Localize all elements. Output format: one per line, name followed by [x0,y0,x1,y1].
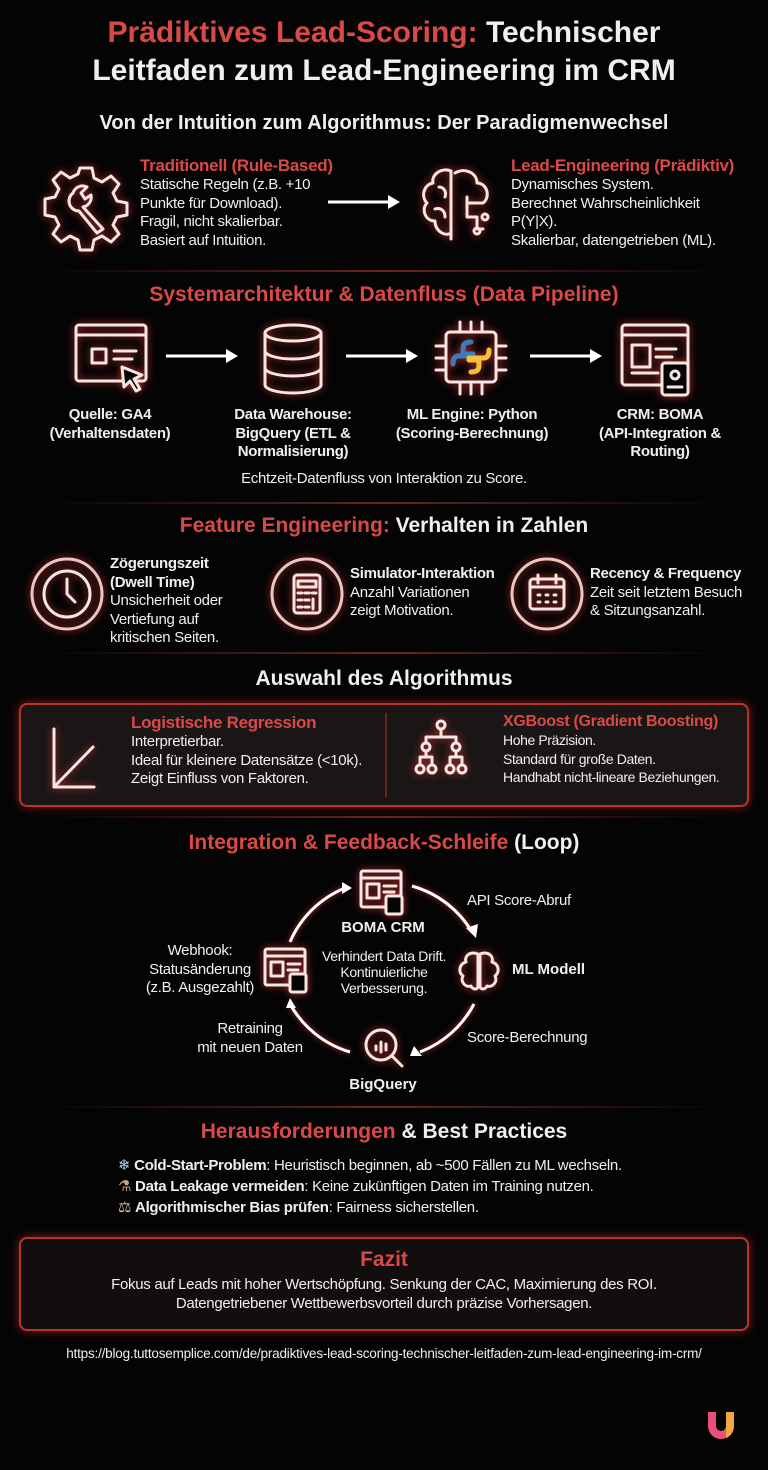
text: lead engineering: Lead-Engineering (Prädiktiv) [511,156,734,175]
arrows [286,881,478,1057]
loop diagram: Webhook: [168,942,232,959]
heading: integration loop: Integration & Feedback-Schleife (Loop) [189,831,579,854]
loop diagram: Score-Berechnung [467,1029,587,1046]
subtitle: paradigm shift: Von der Intuition zum Algorithmus: Der Paradigmenwechsel [100,112,668,134]
labels: Quelle: GA4 [69,406,151,423]
panel: algorithms: Handhabt nicht-lineare Beziehungen. [503,769,719,785]
panel: conclusion: Datengetriebener Wettbewerbsvorteil durch präzise Vorhersagen. [176,1294,592,1312]
arrow [346,349,418,363]
icon: webhook [258,941,314,1000]
icon: python chip [431,317,511,399]
icon: brain [416,162,494,244]
text: lead engineering: Berechnet Wahrscheinlichkeit [511,194,700,212]
text: traditionell: Fragil, nicht skalierbar. [140,213,283,230]
pipeline: (Scoring-Berechnung) [396,424,548,442]
pipeline: Echtzeit-Datenfluss von Interaktion zu Score. [241,470,527,487]
text: traditionell: Statische Regeln (z.B. +10 [140,176,310,193]
pipeline: Normalisierung) [238,443,348,460]
panel: algorithms [19,703,749,807]
text: traditionell: Punkte für Download). [140,194,282,212]
features [24,552,742,646]
panel: conclusion [19,1237,749,1331]
text: lead engineering: Dynamisches System. [511,176,654,193]
icon: CRM [614,318,696,402]
panel: conclusion: Fokus auf Leads mit hoher Wertschöpfung. Senkung der CAC, Maximierung des ROI. [111,1276,657,1293]
loop diagram: BOMA CRM [341,919,425,936]
pipeline: Routing) [630,443,690,460]
panel: algorithms: Interpretierbar. [131,733,224,750]
bullet list: ⚗ Data Leakage vermeiden: Keine zukünftigen Daten im Training nutzen. [118,1178,594,1195]
pipeline: CRM: BOMA [617,406,703,423]
arrow [166,349,238,363]
text: traditionell: Traditionell (Rule-Based) [140,156,333,175]
pipeline: BigQuery (ETL & [235,424,351,442]
heading: system architecture: Systemarchitektur & Datenfluss (Data Pipeline) [149,283,619,306]
panel: algorithms: Logistische Regression [131,713,316,732]
text: lead engineering: P(Y|X). [511,213,557,230]
features: (Dwell Time) [110,574,194,590]
pipeline: Data Warehouse: [234,406,352,423]
pipeline: ML Engine: Python [407,406,537,423]
features: Zeit seit letztem Besuch [590,584,742,600]
loop diagram: ML Modell [512,961,585,978]
heading: algorithm selection: Auswahl des Algorithmus [255,667,513,690]
icon: clock [24,552,110,636]
features: Unsicherheit oder [110,592,222,609]
icon: gear wrench [38,160,134,258]
loop diagram: Kontinuierliche [340,964,428,980]
loop diagram: Statusänderung [149,960,251,978]
loop diagram: mit neuen Daten [197,1038,303,1056]
icon: tree [410,714,472,780]
pipeline [50,317,721,487]
icon: bigquery [359,1023,408,1072]
title [92,16,676,87]
text: lead engineering [511,156,734,248]
icon: calculator [264,552,350,636]
features: zeigt Motivation. [350,602,453,619]
icon: BOMA CRM [354,864,410,922]
arrow [328,195,400,209]
loop diagram: (z.B. Ausgezahlt) [146,979,254,996]
labels: (Verhaltensdaten) [50,424,170,442]
text: lead engineering: Skalierbar, datengetrieben (ML). [511,232,716,248]
bullet list [118,1157,622,1216]
icon: chart [46,724,99,794]
icon: calendar [504,552,590,636]
loop diagram [146,864,587,1093]
panel: algorithms: Hohe Präzision. [503,732,596,748]
title: Prädiktives Lead-Scoring: Technischer [108,16,660,49]
features: & Sitzungsanzahl. [590,602,705,619]
features: Zögerungszeit [110,555,209,572]
features: Anzahl Variationen [350,584,469,600]
panel: conclusion: Fazit [360,1248,408,1271]
features: Recency & Frequency [590,565,741,582]
features: kritischen Seiten. [110,629,219,646]
text: traditionell: Basiert auf Intuition. [140,232,266,248]
panel: algorithms: Standard für große Daten. [503,750,656,766]
title: Leitfaden zum Lead-Engineering im CRM [92,54,676,87]
url: https://blog.tuttosemplice.com/de/pradiktives-lead-scoring-technischer-leitfaden-zum-lead-engineering-im-crm/ [66,1346,702,1361]
panel: algorithms: Ideal für kleinere Datensätze (<10k). [131,752,362,768]
panel: algorithms: XGBoost (Gradient Boosting) [503,713,718,730]
loop diagram: API Score-Abruf [467,892,571,909]
loop diagram: Verbesserung. [341,980,427,996]
arrow [530,349,602,363]
text: traditionell [140,156,333,248]
loop diagram: Retraining [217,1020,283,1037]
features: Vertiefung auf [110,610,198,628]
bullet list: ⚖ Algorithmischer Bias prüfen: Fairness sicherstellen. [118,1199,479,1216]
icon: browser cursor [68,318,154,397]
icon: brain [453,946,505,996]
features: Simulator-Interaktion [350,565,495,582]
bullet list: ❄ Cold-Start-Problem: Heuristisch beginnen, ab ~500 Fällen zu ML wechseln. [118,1157,622,1174]
logo [708,1412,734,1439]
panel: algorithms: Zeigt Einfluss von Faktoren. [131,770,309,787]
labels [50,406,170,442]
heading: feature engineering: Feature Engineering: Verhalten in Zahlen [180,514,588,537]
icon: database [258,318,328,400]
pipeline: (API-Integration & [599,424,721,442]
loop diagram: BigQuery [349,1076,417,1093]
loop diagram: Verhindert Data Drift. [322,948,446,964]
heading: challenges: Herausforderungen & Best Practices [201,1120,567,1143]
